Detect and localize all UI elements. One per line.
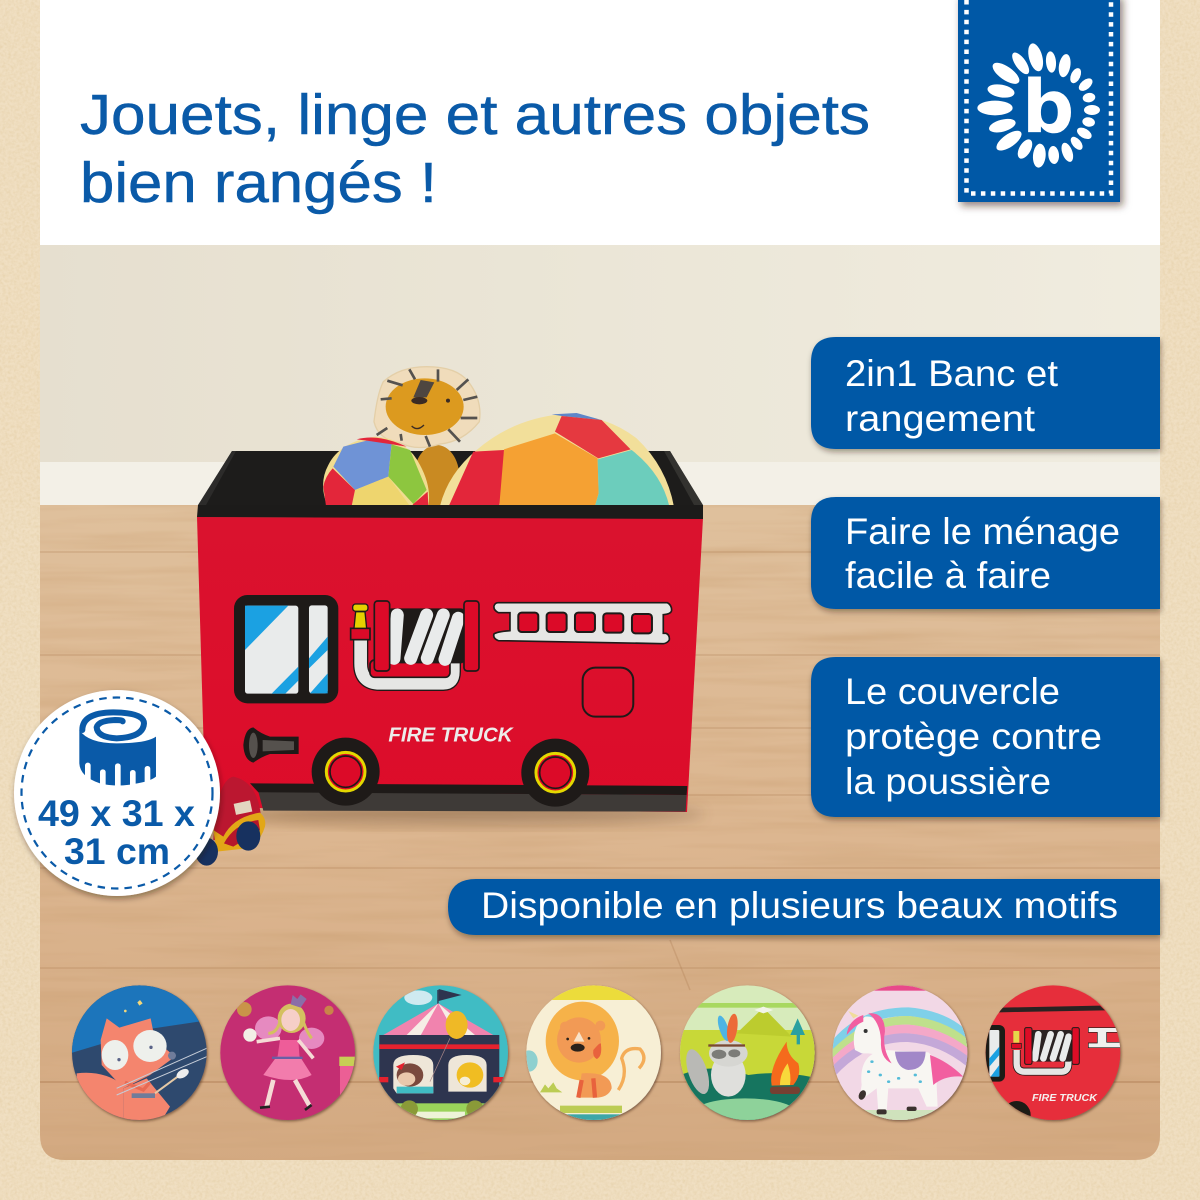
dimension text [38,793,195,872]
rear wheel [521,739,589,807]
dimension text: 31 cm [64,831,170,872]
swatch: raccoon [678,983,818,1125]
title: bien rangés ! [80,151,437,215]
toy car [195,777,265,866]
toy: large patchwork ball [440,413,674,507]
callout: bench and storage: 2in1 Banc et [845,353,1059,394]
swatch: lion [520,983,665,1124]
callout: several motifs: Disponible en plusieurs beaux motifs [481,885,1118,926]
logo letter: b [1022,65,1074,150]
icon: measuring tape [79,712,156,790]
side hatch [583,668,633,717]
swatch: fox [70,983,210,1123]
cab window [234,595,338,703]
callout: dust protection [811,657,1160,817]
swatch: circus train [372,983,512,1123]
callout: dust protection: la poussière [845,761,1051,802]
logo tag [958,0,1120,202]
truck label: FIRE TRUCK [388,724,515,747]
badge: dimensions [14,690,220,896]
callout: dust protection: Le couvercle [845,671,1060,712]
truck artwork [234,595,687,812]
swatch: unicorn [832,983,972,1123]
horn [243,727,299,763]
callout: easy tidying: facile à faire [845,555,1051,596]
callout: several motifs [448,879,1160,935]
icon: flower [977,42,1100,168]
callout: bench and storage: rangement [845,398,1036,439]
swatch: fire truck: FIRE TRUCK [1032,1093,1099,1104]
callout: easy tidying: Faire le ménage [845,511,1120,552]
pattern swatches row 1-3 [70,983,512,1123]
swatch: princess [218,983,358,1123]
pattern swatches row 4-6 [520,983,972,1125]
hose reel [351,601,479,683]
dimension text: 49 x 31 x [38,793,195,834]
callout: bench and storage [811,337,1160,449]
toy: plush lion [374,367,480,508]
title [80,83,870,215]
header band [40,0,1160,245]
storage box: fire truck [197,367,703,812]
ladder [494,603,672,644]
callout: dust protection: protège contre [845,716,1102,757]
bumper strip [250,783,687,812]
toy: small patchwork ball [323,437,429,506]
swatch: fire truck [980,983,1123,1129]
box front face [197,517,703,812]
callout: easy tidying [811,497,1160,609]
photo scene: wall and wooden floor [40,245,1160,1165]
box interior [198,451,703,506]
front wheel [312,738,380,806]
title: Jouets, linge et autres objets [80,83,870,147]
